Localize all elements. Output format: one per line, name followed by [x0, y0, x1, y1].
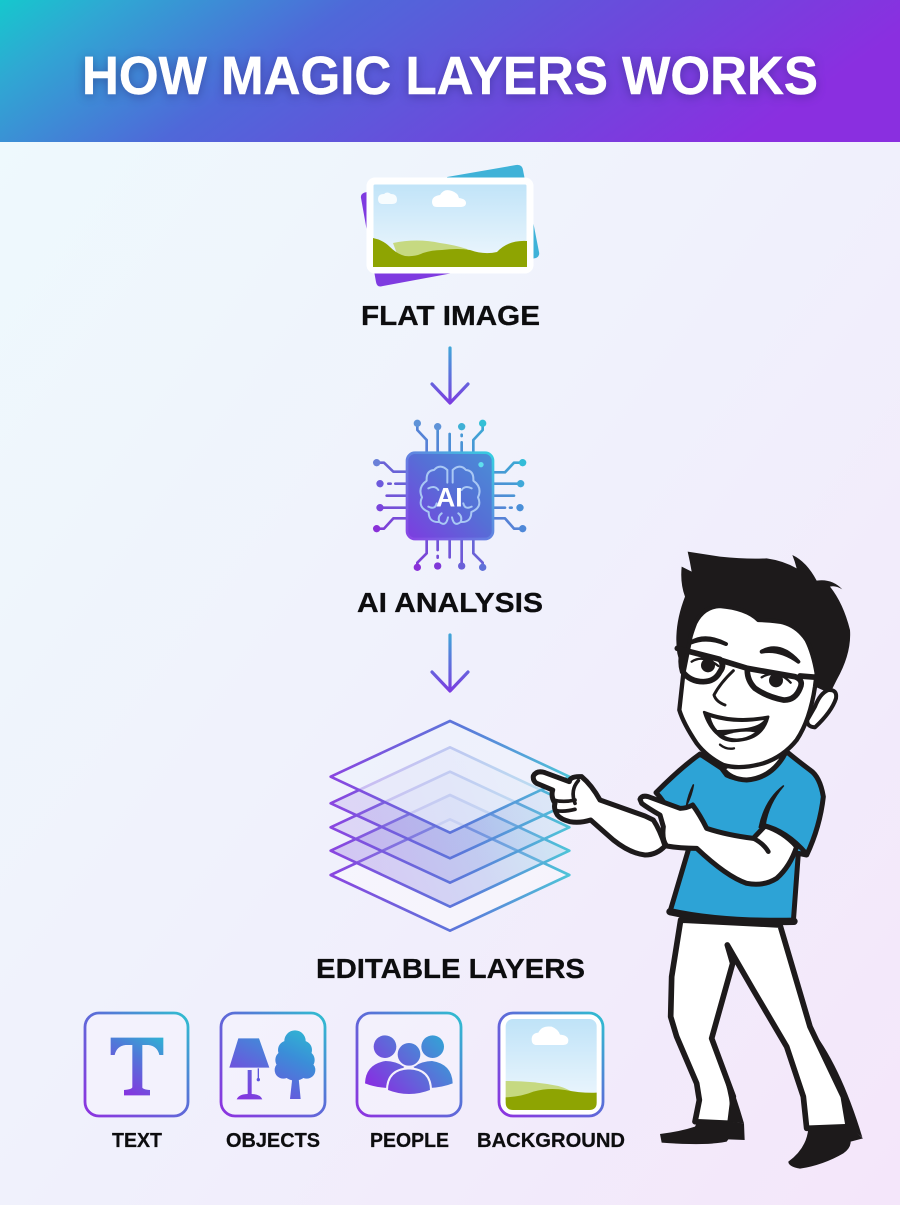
icon card: text — [85, 1013, 188, 1116]
chip label: AI — [436, 483, 463, 513]
icon: layer stack — [331, 721, 569, 931]
t-shirt — [656, 752, 823, 923]
arrow: flat image to AI — [432, 348, 468, 403]
header banner — [0, 0, 900, 142]
label: editable layers: EDITABLE LAYERS — [316, 953, 585, 984]
label: objects: OBJECTS — [226, 1129, 320, 1152]
label: AI analysis: AI ANALYSIS — [357, 587, 543, 618]
neck — [723, 750, 783, 780]
icon card: background — [499, 1013, 603, 1116]
arrow: AI to layers — [432, 635, 468, 691]
hair — [676, 552, 850, 693]
pointing arm left — [533, 772, 665, 855]
circuit nodes — [373, 420, 526, 571]
character: head — [676, 552, 850, 767]
glyph: landscape — [506, 1019, 597, 1110]
icon card: objects — [221, 1013, 325, 1116]
pointing arm right — [640, 796, 797, 884]
icon: flat image — [361, 165, 539, 286]
mouth — [704, 712, 768, 741]
nose — [714, 671, 733, 705]
label: people: PEOPLE — [370, 1129, 449, 1152]
label: background: BACKGROUND — [477, 1129, 625, 1152]
icon: AI chip — [373, 420, 526, 571]
label: flat image: FLAT IMAGE — [361, 300, 540, 331]
eyes — [692, 659, 791, 683]
icon card: people — [357, 1013, 461, 1116]
glyph: serif T — [111, 1038, 163, 1095]
eyebrows — [691, 638, 798, 662]
circuit traces — [377, 423, 523, 567]
face — [679, 606, 817, 767]
label: text: TEXT — [112, 1129, 162, 1152]
ear — [807, 690, 836, 727]
glyph: group of people — [365, 1035, 453, 1095]
brain outline — [420, 467, 480, 524]
glyph: lamp and tree — [229, 1030, 315, 1099]
title: HOW MAGIC LAYERS WORKS — [82, 46, 818, 106]
glasses — [677, 648, 817, 700]
character: torso and arms — [533, 750, 823, 923]
chip body — [407, 453, 493, 539]
character: legs and shoes — [660, 920, 863, 1169]
